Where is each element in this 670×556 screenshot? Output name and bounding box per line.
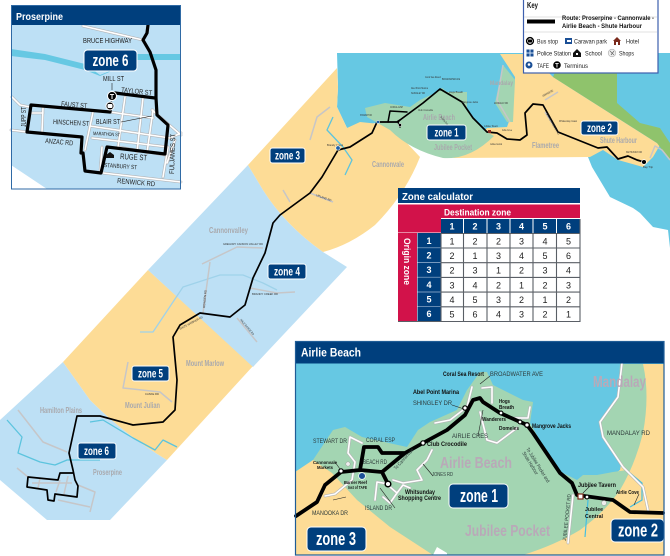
overview place names: Mount Julian <box>125 401 160 410</box>
overview place names: Cannonvale <box>372 160 404 169</box>
overview small labels: MANDALAY RD <box>494 101 509 105</box>
street grid <box>11 26 181 182</box>
zone 1 badge: zone 1 <box>434 126 459 140</box>
origin banner <box>398 233 417 322</box>
overview small labels: SHINGLEY DR <box>411 91 426 95</box>
destination numbers: 4 <box>519 222 524 232</box>
panel: Airlie Beach inset <box>295 341 664 555</box>
street labels: ANZAC RD <box>45 138 73 147</box>
destination numbers: 5 <box>542 222 548 232</box>
table values: 4 <box>519 251 524 261</box>
icon: terminus: T <box>110 94 115 101</box>
table values: 5 <box>542 251 548 261</box>
overview small labels: SHUTE HARBOUR RD <box>179 315 204 331</box>
overview small labels: Bay Trip <box>643 165 653 169</box>
zone 4 area <box>148 165 347 367</box>
street labels: STANBURY ST <box>104 163 137 171</box>
zone 1 badge: zone 1 <box>460 486 498 506</box>
origin headers: 1 <box>426 236 432 246</box>
sea: north <box>337 53 670 160</box>
table grid <box>398 219 580 322</box>
street labels: JUPP ST <box>21 106 28 127</box>
zone 1 badge <box>449 484 508 508</box>
street labels: RUGE ST <box>120 152 147 162</box>
zone 5 area <box>63 270 253 460</box>
bold place labels: Breath <box>499 405 514 411</box>
route loop at Airlie Beach <box>388 111 407 127</box>
table values: 3 <box>566 280 571 290</box>
table values: 3 <box>449 280 455 290</box>
street labels: RENWICK RD <box>117 178 155 188</box>
overview small labels: ARKHOB RD <box>542 88 555 98</box>
destination banner <box>398 204 580 232</box>
stop icons <box>339 406 606 506</box>
zone 3 badge <box>270 148 305 163</box>
zone 5 badge <box>132 366 169 381</box>
table values: 2 <box>542 280 548 290</box>
street labels: FAUST ST <box>61 101 88 110</box>
origin headers: 6 <box>426 309 432 319</box>
table values: 2 <box>496 236 501 246</box>
overview small labels: Whitsunday Coast <box>559 119 577 123</box>
bold place labels: Markets <box>317 465 333 470</box>
street labels: FULJAMES ST <box>169 133 177 174</box>
zone 6 badge: zone 6 <box>84 444 109 458</box>
river <box>11 49 181 76</box>
table values: 3 <box>519 310 524 320</box>
table values: 1 <box>566 310 571 320</box>
street labels: BRUCE HIGHWAY <box>83 38 132 45</box>
heading bar: Airlie Beach <box>301 348 361 360</box>
bold place labels: Cannonvale <box>313 460 337 465</box>
table values <box>449 236 571 320</box>
Mandalay headland <box>495 65 515 122</box>
street names: To Cannonvale <box>393 447 416 471</box>
overview small labels: BRANDY CREEK RD <box>252 292 279 296</box>
suburb names: Mandalay <box>593 374 646 391</box>
mainland: west yellow <box>295 460 433 555</box>
overview place names: Mandalay <box>490 81 514 87</box>
overview small labels: Coral Sea Resort <box>425 75 441 79</box>
destination numbers: 2 <box>472 222 478 232</box>
sea <box>295 341 664 555</box>
zone 3 badge <box>307 527 366 551</box>
route legend: Airlie Beach - Shute Harbour <box>562 23 642 30</box>
overview place names <box>40 81 637 477</box>
street labels: TAYLOR ST <box>121 87 153 97</box>
bold place labels: Wanderers <box>482 417 506 423</box>
table values: 6 <box>472 310 478 320</box>
zone 5 badge: zone 5 <box>138 366 163 380</box>
suburb names: Airlie Beach <box>440 455 512 472</box>
overview small labels: Mangrove Jacks <box>462 100 478 104</box>
icon: school <box>106 152 114 158</box>
zone 3 badge: zone 3 <box>316 529 356 549</box>
origin headers: 4 <box>426 280 432 290</box>
table values: 2 <box>542 310 548 320</box>
table values: 1 <box>519 280 524 290</box>
origin headers: 5 <box>426 294 432 304</box>
panel: zone calculator <box>398 188 580 322</box>
overview small labels: UPLAND RD <box>316 193 333 203</box>
overview small labels: CORAL ESP <box>390 105 403 109</box>
heading bar <box>295 341 664 364</box>
zone 1 area <box>365 88 494 158</box>
route line <box>296 398 663 516</box>
overview place names: Cannonvalley <box>209 226 248 235</box>
route legend <box>527 15 654 30</box>
street names: STEWART DR <box>313 438 347 445</box>
bold place labels: Central <box>585 514 603 520</box>
bold place labels: Jubilee <box>585 507 603 513</box>
legend: caravan park: Caravan park <box>574 38 608 46</box>
destination banner: Destination zone <box>444 208 511 218</box>
table values: 3 <box>472 266 478 276</box>
icon: bus stop <box>106 102 114 110</box>
streets <box>325 363 648 543</box>
origin headers: 2 <box>426 250 432 260</box>
table values: 3 <box>542 266 548 276</box>
table values: 4 <box>472 280 478 290</box>
panel: key <box>524 0 658 73</box>
key heading: Key <box>527 1 538 10</box>
table values: 5 <box>566 236 571 246</box>
legend: TAFE: TAFE <box>537 63 549 70</box>
overview place names: Hamilton Plains <box>40 406 82 415</box>
bold place labels: Jubilee Tavern <box>578 483 616 489</box>
overview place names: Airlie Beach <box>423 113 455 122</box>
callout lines <box>112 83 152 122</box>
zone 2 area <box>453 54 660 167</box>
overview small labels: Hogs Breath <box>449 90 463 94</box>
origin banner: Origin zone <box>402 238 412 285</box>
bus route <box>27 89 644 501</box>
street names: BROADWATER AVE <box>490 371 544 378</box>
zone 3 badge: zone 3 <box>275 148 300 162</box>
table values: 2 <box>449 251 455 261</box>
table values: 2 <box>566 295 571 305</box>
overview small labels: HALE RANGE RD <box>239 318 256 336</box>
overview small labels: Abel Point Marina <box>411 86 428 90</box>
table values: 2 <box>519 295 524 305</box>
bold place labels: Shopping Centre <box>398 496 442 502</box>
zone 4 badge: zone 4 <box>274 264 300 278</box>
street names: MANDALAY RD <box>607 430 650 437</box>
table values: 1 <box>449 236 455 246</box>
table values: 5 <box>449 310 455 320</box>
street names: SHINGLEY DR <box>413 400 452 407</box>
street names: To Jubilee Pocket and <box>524 447 551 484</box>
overview place names: Flametree <box>532 141 559 150</box>
table values: 3 <box>519 236 524 246</box>
sea: south <box>588 140 670 248</box>
legend: school: School <box>585 50 602 58</box>
table values: 4 <box>449 295 455 305</box>
street names: Shute Harbour <box>520 451 539 476</box>
destination numbers <box>449 222 571 232</box>
zone 6 badge: zone 6 <box>92 52 128 70</box>
overview small labels: Jubilee Central <box>490 142 502 146</box>
callout arrows <box>333 376 639 508</box>
destination headers <box>441 219 580 233</box>
overview small labels: GREGORY CANNON VALLEY RD <box>223 242 264 246</box>
heading bar <box>11 5 181 25</box>
table values: 2 <box>496 280 501 290</box>
legend: terminus: T <box>555 64 559 70</box>
overview small labels: STEWART DR <box>360 113 373 117</box>
zone 6 area <box>0 362 167 520</box>
street names: JONES RD <box>432 472 453 478</box>
street labels: MILL ST <box>103 76 125 83</box>
overview small labels: CASKE RD <box>145 392 160 396</box>
overview small labels: To Jubilee Pocket <box>439 115 450 127</box>
origin headers <box>418 233 440 322</box>
icon: terminus <box>108 92 116 101</box>
overview place names: Proserpine <box>93 468 122 477</box>
street names: CORAL ESP <box>366 437 395 444</box>
calculator heading: Zone calculator <box>402 191 473 203</box>
zone 2 badge <box>611 519 664 542</box>
creeks <box>585 473 642 537</box>
bold place labels: Whitsunday <box>405 490 436 496</box>
overview place names: Shute Harbour <box>600 136 637 145</box>
overview small labels <box>145 75 653 396</box>
legend: terminus <box>553 61 589 70</box>
panel: Proserpine inset <box>11 5 181 189</box>
bold place labels: Club Crocodile <box>427 441 467 448</box>
overview place names: Mount Marlow <box>186 359 225 368</box>
bold place labels: Abel Point Marina <box>413 389 459 396</box>
bold place labels <box>313 372 639 520</box>
national park headland <box>553 60 670 160</box>
table values: 2 <box>449 266 455 276</box>
zone 2 badge: zone 2 <box>587 121 612 135</box>
white corner <box>433 547 447 555</box>
bold place labels: Inst of TAFE <box>348 485 367 490</box>
heading bar: Proserpine <box>16 11 63 23</box>
street labels: MARATHON ST <box>93 131 120 138</box>
destination numbers: 6 <box>566 222 571 232</box>
overview small labels: Jubilee Tavern <box>484 124 498 128</box>
overview small labels: BROADWATER AVE <box>442 77 460 81</box>
overview small labels: WHITSUNDAY DR <box>626 150 643 154</box>
creeks <box>7 117 352 465</box>
street names: BEACH RD <box>363 459 387 466</box>
street names: AIRLIE CRES <box>452 433 489 440</box>
suburb names: Jubilee Pocket <box>465 523 551 540</box>
white corner <box>11 165 47 189</box>
suburb names <box>440 374 646 540</box>
table values: 2 <box>472 236 478 246</box>
destination numbers: 3 <box>496 222 501 232</box>
legend: police station: Police Station <box>537 50 571 58</box>
mainland: east yellow <box>500 364 664 555</box>
legend: bus stop: Bus stop <box>537 38 558 46</box>
legend: hotel: Hotel <box>626 38 639 46</box>
street names: ISLAND DR <box>365 505 392 512</box>
zone 1 badge <box>427 125 466 140</box>
bold place labels: Mangrove Jacks <box>532 424 572 430</box>
table values: 6 <box>566 251 571 261</box>
table values: 5 <box>472 295 478 305</box>
overview small labels: Club Crocodile <box>418 108 433 112</box>
table values: 1 <box>542 295 548 305</box>
table values: 4 <box>542 236 548 246</box>
overview small labels: Brandy Creek <box>327 143 343 147</box>
zone 4 badge <box>268 264 306 279</box>
route line <box>27 25 168 173</box>
overview small labels: ROWDEN RD <box>202 289 208 308</box>
street names: JUBILEE POCKET RD <box>562 493 573 541</box>
zone 1 green <box>313 364 646 555</box>
table values: 1 <box>472 251 478 261</box>
street labels <box>21 38 177 188</box>
route legend: Route: Proserpine - Cannonvale - <box>562 15 654 22</box>
icons on overview <box>336 120 646 164</box>
bold place labels: Airlie Cove <box>616 490 639 496</box>
street names <box>312 371 650 541</box>
table values: 2 <box>519 266 524 276</box>
bold place labels: Domeles <box>499 426 519 432</box>
table values: 3 <box>496 251 501 261</box>
street labels: HINSCHEN ST <box>53 119 90 128</box>
origin headers: 3 <box>426 265 432 275</box>
calculator heading <box>398 188 580 203</box>
street names: MANOOKA DR <box>312 510 348 517</box>
table values: 3 <box>496 295 501 305</box>
destination numbers: 1 <box>449 222 455 232</box>
overview small labels: Airlie Cove <box>502 128 512 132</box>
table values: 4 <box>566 266 571 276</box>
roads <box>17 65 670 512</box>
legend: shops: Shops <box>619 50 635 58</box>
street labels: BLAIR ST <box>96 119 121 126</box>
table values: 1 <box>496 266 501 276</box>
overview place names: Jubilee Pocket <box>434 143 472 152</box>
zone 3 area <box>248 68 420 252</box>
bold place labels: Hogs <box>499 399 510 405</box>
legend: terminus: Terminus <box>564 63 589 70</box>
bold place labels: Coral Sea Resort <box>443 372 484 378</box>
zone 6 badge <box>84 50 137 71</box>
zone badges <box>78 121 618 459</box>
bold place labels: Barrier Reef <box>344 480 367 485</box>
zone 6 badge <box>78 443 116 459</box>
overview small labels: SHUTE HARBOUR RD <box>545 112 561 136</box>
table values: 4 <box>496 310 501 320</box>
